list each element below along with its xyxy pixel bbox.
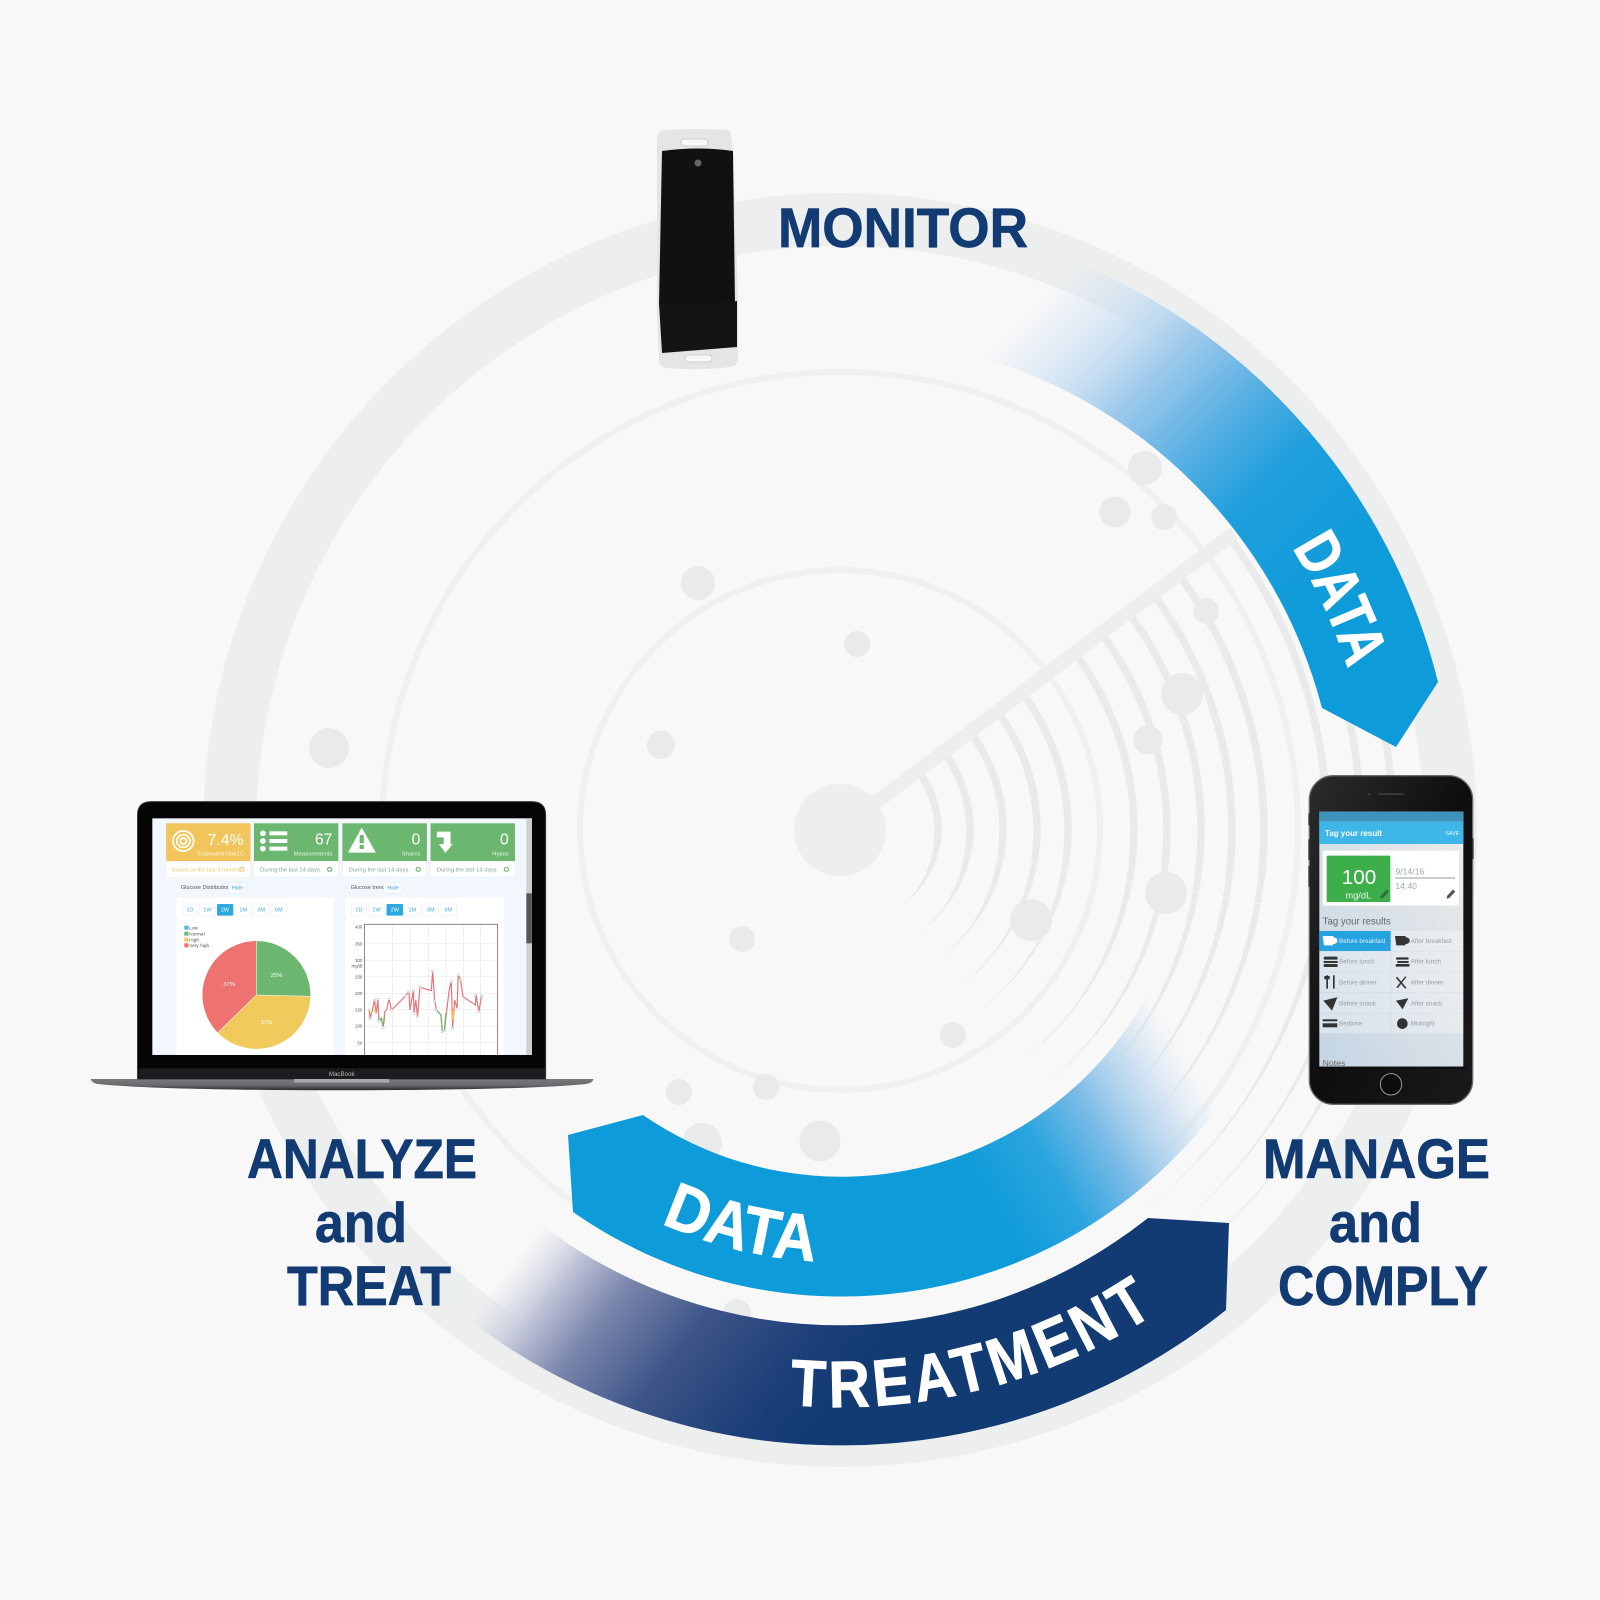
phone: tag your result app xyxy=(1308,776,1474,1104)
stat card: measurements: Measurements xyxy=(294,851,333,857)
pie panel: glucose distribution: 1W xyxy=(203,907,212,913)
trend panel: glucose trend: 1M xyxy=(409,907,417,913)
heading: manage and comply: COMPLY xyxy=(1278,1254,1488,1317)
icon: glucose sensor device xyxy=(657,129,738,369)
laptop: dashboard xyxy=(91,802,593,1090)
ribbon label: data: DATA xyxy=(664,1182,814,1262)
stat card: HbA1C: 7.4% xyxy=(207,832,244,849)
trend panel: glucose trend: 2W xyxy=(391,907,400,913)
laptop screen xyxy=(152,818,532,1055)
inner ring xyxy=(580,570,1100,1090)
tag grid: Before dinner xyxy=(1339,979,1377,986)
stat card: HbA1C: Estimated HbA1C xyxy=(198,851,244,857)
laptop: dashboard: MacBook xyxy=(329,1071,356,1078)
stat card: measurements xyxy=(254,823,338,877)
line chart: 300 xyxy=(355,958,363,963)
stat card: measurements: 67 xyxy=(315,832,332,848)
tag grid: Before lunch xyxy=(1339,959,1375,966)
radial line xyxy=(870,533,1234,807)
ribbon: data bottom xyxy=(568,1006,1209,1296)
pie chart: 37% xyxy=(223,982,235,988)
laptop lid xyxy=(138,802,546,1079)
heading: analyze and treat: ANALYZE xyxy=(247,1127,477,1190)
line chart: 150 xyxy=(355,1007,363,1012)
heading: monitor: MONITOR xyxy=(778,196,1028,259)
pie panel: glucose distribution: Hide xyxy=(232,886,243,892)
phone screen: Notes xyxy=(1323,1058,1346,1068)
trend panel: glucose trend: 1W xyxy=(372,907,382,913)
pie legend xyxy=(184,925,210,949)
pie panel: glucose distribution: Glucose Distribution xyxy=(181,885,230,891)
ribbon label: treatment: TREATMENT xyxy=(792,1274,1144,1408)
ribbon: data top right xyxy=(1002,273,1438,747)
pie chart: 37% xyxy=(260,1020,272,1026)
heading: manage and comply: MANAGE xyxy=(1263,1127,1490,1190)
pie legend: Very high xyxy=(189,943,210,949)
pie chart: 25% xyxy=(271,973,283,979)
tag grid: Before snack xyxy=(1339,1000,1377,1007)
pie panel: glucose distribution: 2W xyxy=(221,907,230,913)
laptop base xyxy=(91,1079,593,1090)
line chart: 100 xyxy=(355,1024,363,1029)
trend panel: glucose trend: Glucose trend xyxy=(351,885,385,891)
line chart: 350 xyxy=(355,941,363,946)
pie panel: glucose distribution: 1M xyxy=(239,907,248,913)
tag grid: Bedtime xyxy=(1339,1021,1363,1028)
home button xyxy=(1380,1074,1402,1095)
ribbon label: data: DATA xyxy=(1294,528,1384,668)
stat card: shares: During the last 14 days xyxy=(349,867,409,873)
stat card: hypos: 0 xyxy=(500,832,509,848)
tag grid: After breakfast xyxy=(1411,938,1452,945)
pie panel: glucose distribution xyxy=(176,883,334,1055)
stat card: shares: Shares xyxy=(402,851,420,857)
trend panel: glucose trend: 1D xyxy=(355,907,363,913)
scattered dots xyxy=(309,451,1219,1327)
tag icons xyxy=(1323,936,1410,1029)
phone body xyxy=(1309,776,1473,1104)
pie panel: glucose distribution: 6M xyxy=(275,907,283,913)
trend panel: glucose trend: 6M xyxy=(444,907,452,913)
pie panel: glucose distribution: 3M xyxy=(257,907,265,913)
trend panel: glucose trend: Hide xyxy=(387,886,399,892)
phone screen: SAVE xyxy=(1445,831,1460,837)
phone bottom bezel overlap xyxy=(1317,1067,1465,1069)
tag grid: Before breakfast xyxy=(1339,938,1386,945)
line chart: 400 xyxy=(355,925,363,930)
stat card: measurements: During the last 14 days xyxy=(260,867,320,873)
outer ring xyxy=(230,220,1450,1440)
line chart: 250 xyxy=(355,974,363,979)
tag grid: After lunch xyxy=(1411,959,1441,966)
stat card: hypos: Hypos xyxy=(492,851,509,857)
reading card: 14:40 xyxy=(1395,881,1417,891)
phone screen: Tag your result xyxy=(1325,829,1382,838)
pie legend: Normal xyxy=(189,931,205,937)
ribbon: treatment xyxy=(479,1218,1229,1446)
heading: analyze and treat: and xyxy=(315,1191,407,1254)
line chart: 50 xyxy=(357,1040,363,1045)
line chart: 200 xyxy=(355,991,363,996)
line chart xyxy=(351,924,497,1055)
stat card: shares xyxy=(342,823,427,877)
tag grid: After snack xyxy=(1411,1000,1443,1007)
pie legend: High xyxy=(189,937,199,943)
center hub xyxy=(794,784,886,876)
stat card: shares: 0 xyxy=(411,832,421,848)
reading card: mg/dL xyxy=(1345,891,1371,901)
pie chart xyxy=(202,941,310,1049)
stat card: HbA1C: Based on the last 3 months xyxy=(172,867,241,873)
reading card: 100 xyxy=(1342,866,1376,889)
stat card: hypos: During the last 14 days xyxy=(437,867,497,873)
tag grid: Midnight xyxy=(1411,1021,1435,1028)
pie panel: glucose distribution: 1D xyxy=(186,907,193,913)
phone screen xyxy=(1319,812,1463,1068)
reading card xyxy=(1323,851,1459,906)
pie legend: Low xyxy=(189,925,199,931)
signal arcs sweeping from the radial line xyxy=(287,277,1393,1383)
heading: manage and comply xyxy=(1263,1127,1490,1317)
heading: manage and comply: and xyxy=(1329,1191,1422,1254)
stat card: HbA1C xyxy=(166,823,250,877)
stat card: hypos xyxy=(431,823,515,877)
trend panel: glucose trend: 3M xyxy=(427,907,435,913)
heading: analyze and treat: TREAT xyxy=(287,1254,451,1317)
middle ring xyxy=(382,372,1298,1288)
reading card: 9/14/16 xyxy=(1395,866,1424,876)
line chart: mg/dl xyxy=(351,964,362,969)
heading: analyze and treat xyxy=(247,1127,477,1317)
tag grid: After dinner xyxy=(1411,979,1443,986)
trend panel: glucose trend xyxy=(345,883,504,1055)
phone screen: Tag your results xyxy=(1323,916,1391,927)
tag grid xyxy=(1319,931,1463,1033)
